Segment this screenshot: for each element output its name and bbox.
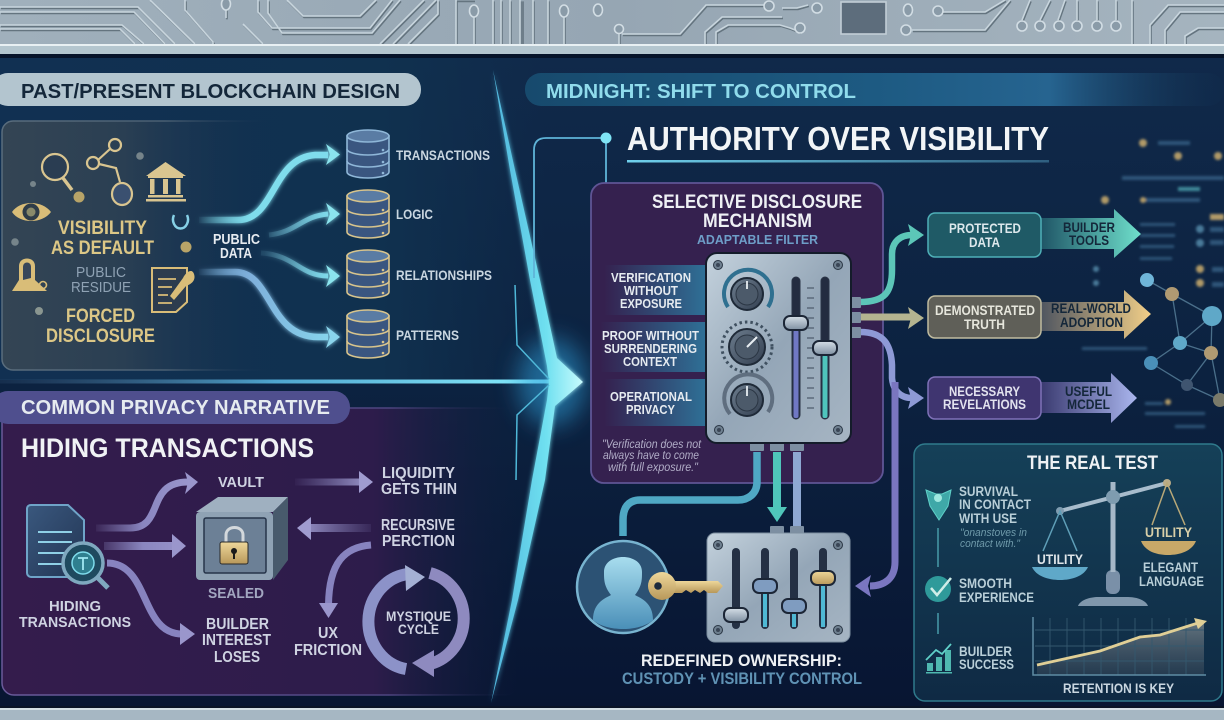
text: redefined ownership: REDEFINED OWNERSHIP: — [641, 651, 842, 670]
outcome: necessary revelations to useful model: REVELATIONS — [943, 397, 1026, 412]
strip: verification without exposure — [604, 265, 708, 315]
icon: document and pen — [152, 268, 195, 312]
label: builder interest loses: INTEREST — [202, 632, 271, 649]
strip: operational privacy: OPERATIONAL — [610, 389, 692, 404]
slider: purple — [784, 277, 808, 419]
ports — [750, 297, 861, 534]
text: builder success — [959, 644, 1014, 672]
strip: proof without surrendering context: CONTEXT — [623, 354, 677, 369]
decorative dots — [11, 152, 192, 315]
arrow: public data to transactions — [199, 144, 340, 220]
label: recursive perction: RECURSIVE — [381, 517, 455, 534]
strip: proof without surrendering context: PROOF WITHOUT — [602, 328, 699, 343]
pipe: teal to protected data — [860, 224, 924, 302]
text: redefined ownership: CUSTODY + VISIBILITY CONTROL — [622, 669, 862, 688]
quote: verification: with full exposure." — [608, 462, 699, 474]
strip: proof without surrendering context: SURRENDERING — [604, 341, 697, 356]
strip: verification without exposure: EXPOSURE — [620, 296, 682, 311]
text: forced disclosure: DISCLOSURE — [46, 326, 155, 347]
label: recursive perction: PERCTION — [382, 533, 455, 550]
pipe: blue back down to lower sliders — [855, 382, 895, 597]
arrow: to builder interest — [107, 563, 195, 645]
database: relationships: RELATIONSHIPS — [396, 267, 492, 283]
text: public residue — [71, 264, 131, 296]
label: elegant language — [1139, 560, 1204, 589]
outcome: protected data to builder tools: DATA — [969, 235, 1000, 250]
database: logic: LOGIC — [396, 206, 433, 222]
knob: bottom — [724, 374, 772, 416]
text: forced disclosure: FORCED — [66, 306, 135, 327]
pill: past present heading: PAST/PRESENT BLOCKCHAIN DESIGN — [21, 81, 400, 103]
text: public residue: RESIDUE — [71, 279, 131, 296]
knob: middle — [722, 322, 772, 372]
beam: horizontal light line — [0, 380, 550, 384]
label: hiding transactions caption — [19, 598, 131, 631]
pipe: teal arrow to lower panel — [767, 452, 787, 522]
diagram: mystique cycle: MYSTIQUE — [386, 609, 451, 624]
text: survival in contact with use: SURVIVAL — [959, 484, 1018, 499]
diagram: balance scale — [1032, 479, 1196, 606]
strip: operational privacy: PRIVACY — [626, 402, 675, 417]
text: visibility as default — [51, 218, 154, 259]
label: builder interest loses: BUILDER — [206, 616, 269, 633]
icon: bank — [146, 162, 186, 202]
connector line — [937, 528, 939, 634]
text: visibility as default: VISIBILITY — [58, 218, 147, 239]
quote: verification: "Verification does not — [602, 439, 702, 451]
panel: visibility as default — [2, 121, 274, 370]
heading: selective disclosure — [652, 192, 862, 232]
label: vault: VAULT — [218, 474, 264, 491]
label: elegant language: LANGUAGE — [1139, 574, 1204, 589]
strip: verification without exposure: VERIFICATION — [611, 270, 691, 285]
panel: the real test — [914, 444, 1222, 701]
title: authority over visibility: AUTHORITY OVER VISIBILITY — [627, 120, 1049, 157]
icon: sealed vault with padlock — [196, 497, 288, 580]
label: public data — [213, 232, 260, 262]
frame bar top — [0, 44, 1224, 58]
database: transactions — [347, 130, 490, 178]
label: liquidity gets thin: GETS THIN — [381, 481, 457, 498]
panel: common privacy narrative — [0, 391, 518, 695]
text: public residue: PUBLIC — [76, 264, 126, 281]
database: transactions: TRANSACTIONS — [396, 147, 490, 163]
diagram: mystique cycle: CYCLE — [398, 622, 439, 637]
arrow: perception to vault — [297, 517, 371, 540]
outcome: demonstrated truth to real-world adoption — [928, 290, 1151, 339]
label: retention is key: RETENTION IS KEY — [1063, 681, 1174, 696]
icon: shield — [926, 490, 951, 520]
outcome: necessary revelations to useful model: NECESSARY — [949, 384, 1020, 399]
outcome: protected data to builder tools: PROTECTED — [949, 221, 1021, 236]
label: builder interest loses: LOSES — [214, 649, 260, 666]
outcome: necessary revelations to useful model — [928, 373, 1137, 423]
text: survival in contact with use: IN CONTACT — [959, 497, 1032, 512]
quote: verification: always have to come — [603, 450, 699, 462]
label: ux friction — [294, 625, 362, 659]
icon: person with key — [12, 258, 47, 291]
text: builder success: SUCCESS — [959, 657, 1014, 672]
label: liquidity gets thin: LIQUIDITY — [382, 465, 456, 482]
icon: network nodes — [87, 139, 132, 205]
label: elegant language: ELEGANT — [1143, 560, 1199, 575]
pipe: down to person — [623, 452, 757, 536]
label: public data: DATA — [220, 246, 252, 262]
arrow: to vault label — [96, 472, 198, 528]
label: liquidity gets thin — [381, 465, 457, 498]
quote: small italic: "onanstoves in — [960, 527, 1027, 539]
heading: the real test: THE REAL TEST — [1027, 453, 1158, 474]
quote: small italic — [960, 527, 1027, 550]
outcome: protected data to builder tools — [928, 209, 1141, 258]
icon: magnifier — [42, 154, 72, 190]
text: redefined ownership — [622, 651, 862, 688]
database: patterns — [347, 310, 459, 358]
arrow: public data to relationships — [261, 253, 340, 287]
icon: growth bars — [926, 644, 952, 674]
subtitle: adaptable filter: ADAPTABLE FILTER — [697, 232, 819, 247]
label: hiding transactions caption: TRANSACTIONS — [19, 614, 131, 631]
knob: top — [724, 270, 772, 310]
arrow: to sealed vault — [104, 534, 186, 558]
text: forced disclosure — [46, 306, 155, 347]
text: smooth experience — [959, 576, 1034, 605]
strip: verification without exposure: WITHOUT — [624, 283, 678, 298]
icon: user with key — [577, 541, 723, 633]
database: relationships — [347, 250, 492, 298]
text: smooth experience: EXPERIENCE — [959, 590, 1034, 605]
pill: common privacy narrative heading — [0, 391, 350, 424]
quote: small italic: contact with." — [960, 538, 1021, 550]
diagram: balance scale: UTILITY — [1037, 552, 1083, 567]
outcome: demonstrated truth to real-world adoption: TRUTH — [964, 317, 1005, 332]
icon: gold key — [648, 572, 723, 600]
outcome: demonstrated truth to real-world adoption: ADOPTION — [1060, 315, 1123, 330]
pill: common privacy narrative heading: COMMON PRIVACY NARRATIVE — [21, 397, 330, 419]
outcome: protected data to builder tools: TOOLS — [1069, 233, 1109, 248]
database: logic — [347, 190, 433, 238]
icon: eye — [12, 203, 51, 221]
pill: past present heading — [0, 73, 421, 106]
arrow: vault to liquidity — [295, 471, 373, 493]
network graph — [1140, 273, 1224, 407]
label: builder interest loses — [202, 616, 271, 666]
outcome: demonstrated truth to real-world adoption: REAL-WORLD — [1051, 301, 1131, 316]
heading: selective disclosure: MECHANISM — [703, 211, 812, 232]
text: survival in contact with use — [959, 484, 1032, 526]
outcome: necessary revelations to useful model: MCDEL — [1067, 397, 1110, 412]
lower control panel: four sliders — [707, 533, 850, 642]
arrow: central glowing chevron — [491, 70, 586, 703]
diagram: balance scale: UTILITY — [1145, 525, 1192, 540]
slider: teal — [813, 277, 837, 419]
frame bar bottom — [0, 706, 1224, 720]
control panel: knobs and sliders — [706, 253, 851, 443]
quote: verification — [602, 439, 702, 474]
heading: selective disclosure: SELECTIVE DISCLOSURE — [652, 192, 862, 213]
left background shading — [0, 58, 545, 380]
outcome: protected data to builder tools: BUILDER — [1063, 220, 1115, 235]
icon: check circle — [925, 576, 951, 602]
pipe: blue to necessary revelations — [860, 332, 924, 409]
diagram: mystique cycle — [368, 565, 464, 677]
pill: midnight heading: MIDNIGHT: SHIFT TO CONTROL — [546, 81, 856, 103]
arrow: perception to ux friction — [319, 545, 371, 618]
slider: tick marks — [807, 288, 814, 408]
arrow: public data to patterns — [199, 272, 340, 348]
chart: retention line — [1033, 617, 1207, 675]
background data dashes and network — [1082, 139, 1224, 428]
pill: midnight heading — [525, 73, 1224, 106]
strip: proof without surrendering context — [600, 322, 708, 372]
arrow: public data to logic — [269, 203, 340, 235]
label: recursive perction — [381, 517, 455, 550]
text: builder success: BUILDER — [959, 644, 1012, 659]
strip: operational privacy — [604, 379, 708, 426]
icon: document with magnifier — [27, 505, 108, 588]
outcome: necessary revelations to useful model: USEFUL — [1065, 384, 1112, 399]
label: ux friction: FRICTION — [294, 642, 362, 659]
panel: selective disclosure mechanism — [591, 183, 883, 483]
pipe: blue to lower panel — [793, 452, 801, 526]
database: patterns: PATTERNS — [396, 327, 459, 343]
text: visibility as default: AS DEFAULT — [51, 238, 154, 259]
label: hiding transactions caption: HIDING — [49, 598, 101, 615]
circuit board top band — [0, 0, 1224, 45]
label: sealed: SEALED — [208, 585, 264, 602]
pipe: tan to demonstrated truth — [860, 307, 924, 329]
outcome: demonstrated truth to real-world adoption: DEMONSTRATED — [935, 303, 1035, 318]
label: ux friction: UX — [318, 625, 339, 642]
text: smooth experience: SMOOTH — [959, 576, 1012, 591]
heading: hiding transactions: HIDING TRANSACTIONS — [21, 433, 314, 463]
label: public data: PUBLIC — [213, 232, 260, 248]
text: survival in contact with use: WITH USE — [959, 511, 1017, 526]
connector: node line into mechanism — [534, 132, 640, 278]
